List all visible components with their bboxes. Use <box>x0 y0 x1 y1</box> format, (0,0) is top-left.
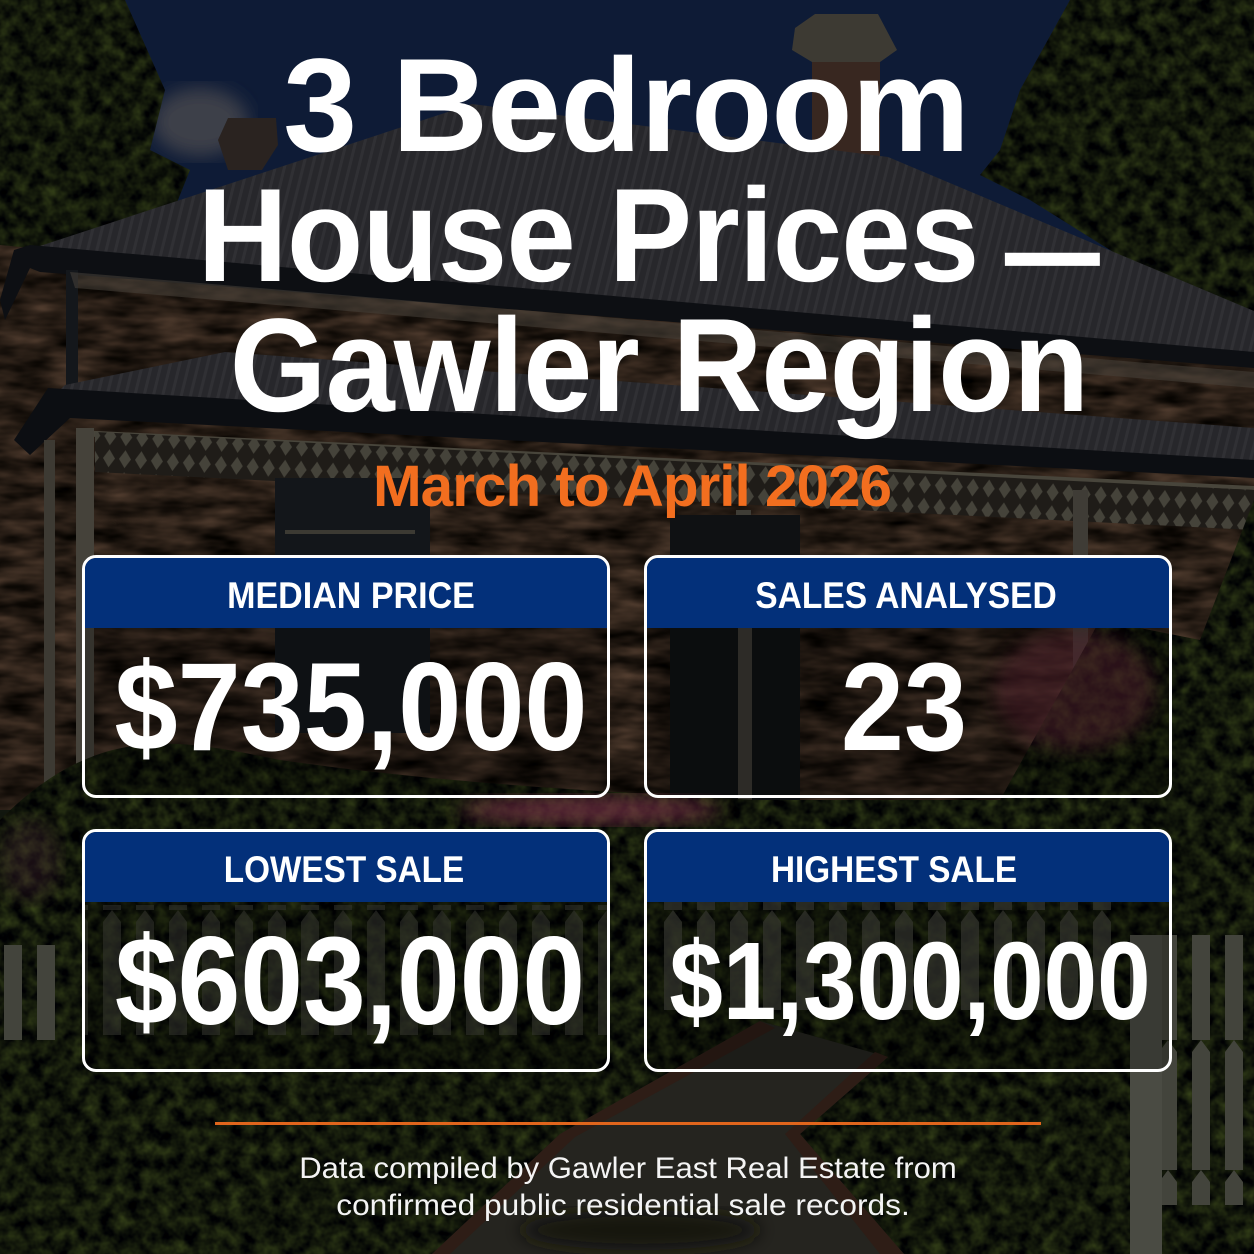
card: sales analysed: SALES ANALYSED <box>755 575 1057 616</box>
footer text: confirmed public residential sale records. <box>336 1189 910 1222</box>
subtitle: March to April 2026 <box>373 454 891 519</box>
footer text: Data compiled by Gawler East Real Estate from <box>299 1152 957 1185</box>
card: highest sale <box>644 829 1172 1072</box>
card: median price <box>82 555 610 798</box>
card: sales analysed <box>644 555 1172 798</box>
posts and windows <box>76 428 94 828</box>
card: lowest sale: $603,000 <box>115 912 585 1051</box>
title line 1: 3 Bedroom <box>283 32 969 180</box>
title <box>198 32 1100 440</box>
upper wall & porch wall <box>0 245 1254 810</box>
card: lowest sale <box>82 829 610 1072</box>
card: highest sale: $1,300,000 <box>669 920 1151 1043</box>
card: sales analysed: 23 <box>841 638 967 777</box>
garden <box>0 810 1254 1254</box>
sky <box>0 0 1254 340</box>
picket fence <box>85 905 610 1035</box>
garden path <box>432 1021 904 1254</box>
chimneys <box>812 60 880 165</box>
verandah frieze <box>76 430 1254 490</box>
footer rule <box>215 1122 1041 1125</box>
card: highest sale: HIGHEST SALE <box>771 849 1017 890</box>
title dash: — <box>1005 176 1099 324</box>
card: median price: MEDIAN PRICE <box>227 575 475 616</box>
lower roof <box>60 352 1254 462</box>
card: lowest sale: LOWEST SALE <box>224 849 464 890</box>
title line 2: House Prices <box>198 162 978 310</box>
footer text <box>299 1152 957 1222</box>
title line 3: Gawler Region <box>230 292 1088 440</box>
card: median price: $735,000 <box>115 638 587 777</box>
upper roof <box>24 104 1254 360</box>
